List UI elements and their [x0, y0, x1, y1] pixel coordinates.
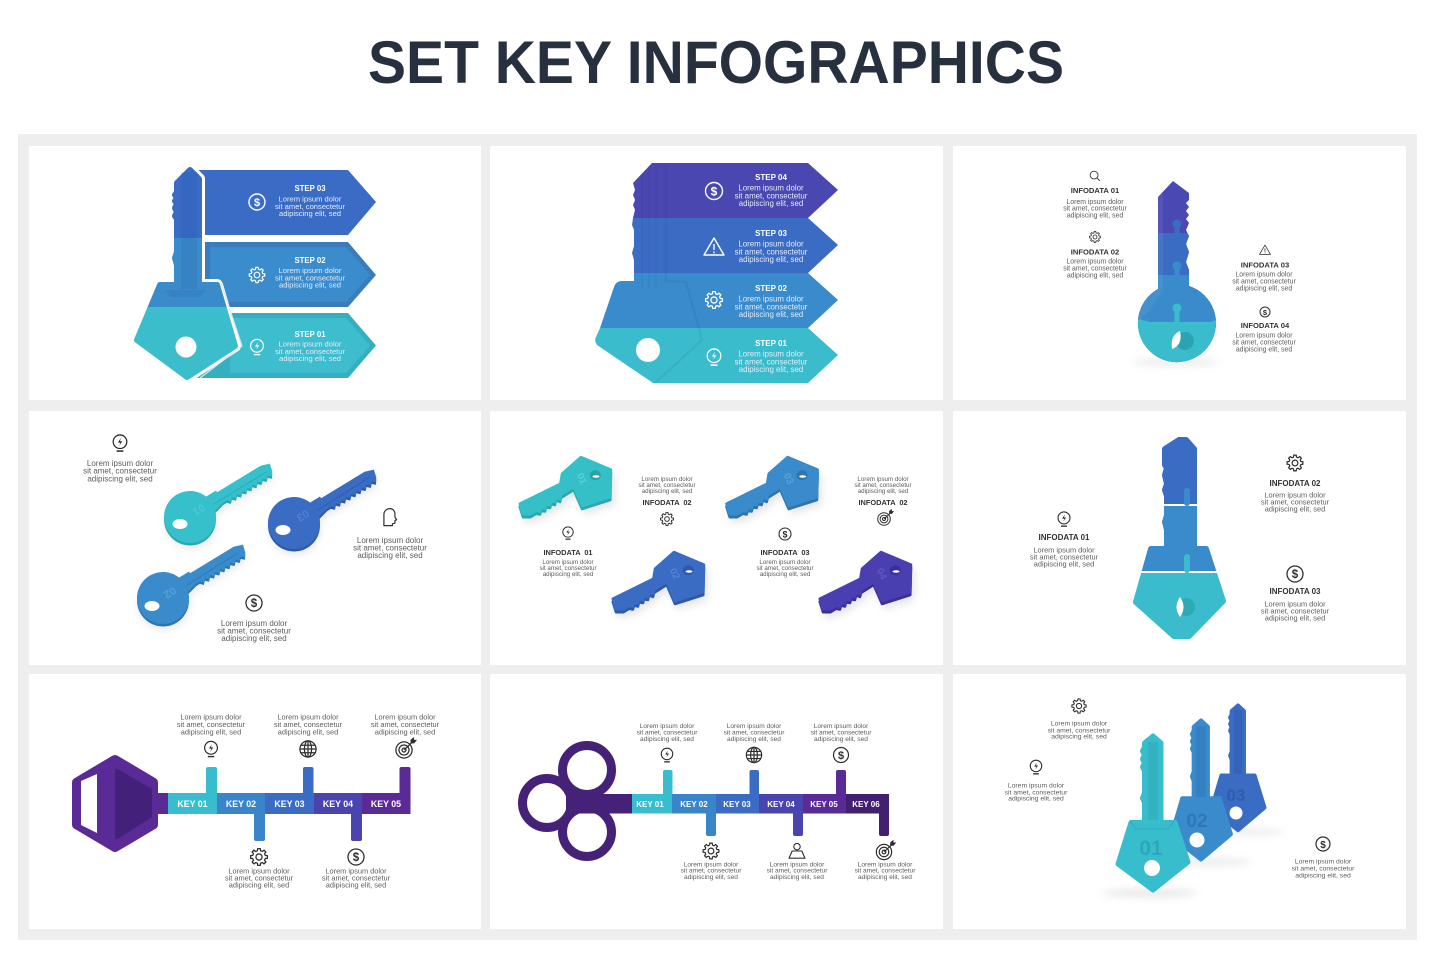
band: step 04 — [633, 163, 838, 218]
segmented key — [1136, 440, 1223, 636]
segment: key 05: KEY 05 — [810, 800, 838, 809]
icon: bulb — [251, 339, 263, 355]
key 02 — [613, 552, 707, 616]
arrow: step 02 — [200, 242, 376, 307]
text: infodata 02 right: Lorem ipsum dolor — [857, 476, 909, 483]
text block: adipiscing elit, sed — [770, 874, 824, 881]
text block: adipiscing elit, sed — [221, 634, 287, 643]
key 01: 01 — [574, 472, 589, 487]
band: step 01 — [595, 328, 838, 383]
text: step 02: adipiscing elit, sed — [279, 280, 341, 290]
icon: bulb — [661, 748, 673, 762]
text block: Lorem ipsum dolor — [858, 862, 913, 868]
text: step 03: Lorem ipsum dolor — [738, 240, 804, 248]
text block: adipiscing elit, sed — [858, 874, 912, 881]
text: infodata 02: sit amet, consectetur — [1063, 266, 1127, 272]
text: infodata 02 — [1063, 248, 1127, 280]
text block: sit amet, consectetur — [1048, 728, 1111, 734]
timeline stems — [206, 767, 410, 841]
icon: gear — [1072, 699, 1086, 713]
text block: Lorem ipsum dolor — [684, 862, 739, 868]
text block: adipiscing elit, sed — [684, 874, 738, 881]
key 01: 01 — [1139, 837, 1163, 860]
panel: three standing keys — [953, 674, 1406, 929]
text block: Lorem ipsum dolor — [325, 866, 387, 876]
text block: sit amet, consectetur — [637, 730, 698, 736]
icon: dollar — [834, 748, 848, 762]
icon: gear — [1090, 232, 1100, 242]
segment: key 06 — [846, 794, 889, 814]
text: step 03 — [735, 229, 808, 264]
text: infodata 03: adipiscing elit, sed — [1265, 614, 1325, 622]
text block: adipiscing elit, sed — [1051, 734, 1107, 740]
icon: dollar — [1260, 307, 1270, 317]
text block: sit amet, consectetur — [681, 868, 742, 874]
text block: sit amet, consectetur — [855, 868, 916, 874]
panel: three flat keys — [29, 411, 481, 665]
text: infodata 02 — [638, 476, 696, 507]
segment: key 01 — [168, 793, 217, 814]
text: step 02: Lorem ipsum dolor — [738, 294, 804, 304]
key 03: 03 — [1227, 786, 1245, 805]
text: step 01: sit amet, consectetur — [735, 357, 808, 366]
text: infodata 03: sit amet, consectetur — [756, 565, 814, 572]
panel: vertical key in three parts — [953, 411, 1406, 665]
key 03: 03 — [294, 507, 311, 523]
segment: key 06: KEY 06 — [852, 800, 880, 809]
text: infodata 02: sit amet, consectetur — [1261, 498, 1330, 506]
segment: key 03: KEY 03 — [274, 799, 305, 809]
text: infodata 03: Lorem ipsum dolor — [1264, 600, 1326, 608]
segment: key 03 — [716, 794, 759, 814]
text: step 03: STEP 03 — [755, 229, 787, 238]
text: step 01: adipiscing elit, sed — [279, 354, 341, 363]
icon: dollar: $ — [782, 529, 788, 539]
icon: dollar — [1287, 566, 1303, 582]
text: infodata 01: Lorem ipsum dolor — [542, 559, 594, 566]
icon: search — [1090, 171, 1100, 181]
text block: Lorem ipsum dolor — [770, 862, 825, 868]
text: infodata 01: adipiscing elit, sed — [1034, 560, 1094, 568]
text: step 03: adipiscing elit, sed — [279, 209, 341, 218]
icon: target — [876, 841, 895, 860]
text: infodata 01 — [1063, 186, 1127, 220]
icon: dollar: $ — [1320, 840, 1326, 851]
segment: key 05: KEY 05 — [371, 799, 401, 809]
text: step 02: sit amet, consectetur — [735, 302, 808, 311]
key 03 — [726, 457, 821, 521]
key 01 — [1102, 736, 1198, 897]
text: infodata 02: adipiscing elit, sed — [1067, 272, 1123, 280]
timeline stems — [663, 770, 889, 836]
text block: Lorem ipsum dolor — [228, 866, 290, 876]
text block: adipiscing elit, sed — [375, 728, 435, 736]
text: infodata 04: INFODATA 04 — [1241, 321, 1290, 330]
text block: adipiscing elit, sed — [326, 880, 386, 890]
text: step 04: sit amet, consectetur — [735, 191, 808, 200]
hexagon key head — [77, 760, 169, 847]
text: infodata 02: sit amet, consectetur — [638, 482, 696, 489]
text block: Lorem ipsum dolor — [640, 723, 695, 730]
icon: warning — [1260, 245, 1270, 254]
text block: sit amet, consectetur — [1292, 866, 1355, 872]
key 02: 02 — [667, 567, 682, 582]
text: infodata 03: sit amet, consectetur — [1261, 606, 1330, 616]
icon: dollar — [249, 194, 265, 210]
text block: adipiscing elit, sed — [229, 880, 289, 890]
text: infodata 01: sit amet, consectetur — [539, 565, 597, 572]
text block: Lorem ipsum dolor — [1051, 720, 1108, 728]
icon: bulb — [1058, 512, 1070, 526]
text block: sit amet, consectetur — [274, 720, 343, 729]
key shape — [137, 170, 242, 378]
text: infodata 02: adipiscing elit, sed — [642, 488, 693, 495]
text block: sit amet, consectetur — [767, 868, 828, 874]
title: SET KEY INFOGRAPHICS — [368, 29, 1064, 96]
text: infodata 02: INFODATA 02 — [1071, 248, 1119, 256]
segment: key 01 — [632, 794, 672, 814]
panel: clover key timeline — [490, 674, 943, 929]
text: step 01: Lorem ipsum dolor — [738, 350, 804, 358]
text: infodata 02: INFODATA 02 — [1270, 479, 1321, 488]
text block: Lorem ipsum dolor — [87, 459, 153, 468]
segment: key 03: KEY 03 — [723, 800, 751, 809]
text block: adipiscing elit, sed — [814, 736, 868, 743]
text block: adipiscing elit, sed — [87, 474, 153, 484]
text: step 01 — [735, 339, 808, 374]
text: step 02: sit amet, consectetur — [275, 273, 346, 282]
segment: key 01: KEY 01 — [636, 800, 664, 809]
band: step 02 — [600, 273, 838, 328]
key 02 — [1171, 721, 1252, 866]
text: infodata 01: INFODATA 01 — [543, 548, 593, 557]
text: step 04 — [735, 173, 808, 208]
text: step 03: STEP 03 — [294, 184, 326, 193]
icon: bulb — [563, 527, 573, 539]
text: step 02: adipiscing elit, sed — [739, 310, 803, 319]
key 03 — [1211, 705, 1284, 835]
key details — [642, 165, 702, 383]
icon: dollar: $ — [1263, 308, 1268, 317]
text: infodata 01: INFODATA 01 — [1071, 186, 1120, 195]
text: step 01: sit amet, consectetur — [275, 347, 346, 356]
segment: key 02 — [672, 794, 716, 814]
icon: dollar: $ — [251, 598, 258, 610]
text: step 04: STEP 04 — [755, 173, 787, 182]
text: infodata 01: adipiscing elit, sed — [1067, 212, 1123, 220]
text: step 04: adipiscing elit, sed — [739, 199, 803, 208]
text block: Lorem ipsum dolor — [277, 712, 339, 722]
text: infodata 02: adipiscing elit, sed — [1265, 504, 1325, 514]
text: infodata 04 — [1232, 321, 1296, 354]
text: infodata 03: adipiscing elit, sed — [760, 571, 811, 578]
text block: Lorem ipsum dolor — [727, 723, 782, 730]
text: infodata 03 — [756, 548, 814, 578]
text block: adipiscing elit, sed — [1295, 872, 1351, 880]
text: infodata 02: INFODATA 02 — [642, 498, 692, 507]
text block: Lorem ipsum dolor — [374, 712, 436, 722]
icon: globe — [746, 747, 762, 763]
icon: gear — [703, 843, 719, 859]
icon: dollar — [706, 182, 722, 200]
icon: dollar: $ — [838, 750, 844, 762]
text: infodata 02: Lorem ipsum dolor — [641, 476, 693, 483]
icon: warning — [704, 238, 724, 255]
panel: hexagon key timeline — [29, 674, 481, 929]
segment: key 04: KEY 04 — [323, 799, 353, 809]
text block: adipiscing elit, sed — [181, 728, 241, 736]
arrow: step 03 — [198, 170, 376, 235]
text: infodata 02: Lorem ipsum dolor — [1066, 258, 1124, 266]
text: infodata 02 right: INFODATA 02 — [858, 498, 908, 507]
text block: Lorem ipsum dolor — [180, 712, 242, 722]
text: step 01: adipiscing elit, sed — [739, 365, 803, 374]
text: step 03: sit amet, consectetur — [275, 202, 346, 211]
text: infodata 04: adipiscing elit, sed — [1236, 346, 1292, 354]
icon: gear — [1287, 455, 1303, 471]
segment: key 05 — [803, 794, 846, 814]
key 01 — [154, 445, 286, 559]
text block: adipiscing elit, sed — [278, 728, 338, 736]
text: step 01: Lorem ipsum dolor — [279, 340, 342, 348]
text: step 01: STEP 01 — [755, 339, 787, 348]
segment: key 02: KEY 02 — [680, 800, 708, 809]
text block: sit amet, consectetur — [217, 626, 291, 636]
text: step 03: sit amet, consectetur — [735, 247, 808, 256]
segment: key 02 — [217, 793, 265, 814]
panel: four pentagon keys — [490, 411, 943, 665]
segment: key 03 — [265, 793, 314, 814]
text block: sit amet, consectetur — [1005, 790, 1068, 796]
text: infodata 02 right: adipiscing elit, sed — [858, 488, 909, 495]
key 01: 01 — [190, 501, 207, 517]
icon: gear — [706, 292, 722, 308]
text: infodata 02 right: sit amet, consectetur — [854, 482, 912, 489]
text: step 02 — [735, 284, 808, 319]
text block: Lorem ipsum dolor — [221, 619, 287, 628]
segment: key 04 — [759, 794, 803, 814]
text: step 02: STEP 02 — [755, 284, 787, 293]
text block: Lorem ipsum dolor — [357, 536, 423, 545]
key hole — [636, 338, 660, 362]
text: infodata 03: INFODATA 03 — [1270, 587, 1321, 596]
icon: bulb — [205, 741, 217, 757]
puzzle key — [1138, 181, 1216, 362]
icon: user — [789, 843, 805, 858]
text block: Lorem ipsum dolor — [1008, 782, 1065, 790]
icon: gear — [249, 267, 265, 283]
icon: gear — [661, 513, 673, 525]
text: step 03 — [275, 184, 346, 218]
text block: sit amet, consectetur — [353, 544, 427, 552]
icon: dollar: $ — [353, 852, 360, 864]
text block: adipiscing elit, sed — [727, 736, 781, 743]
segment: key 02: KEY 02 — [226, 799, 256, 809]
icon: dollar: $ — [254, 197, 260, 209]
text: infodata 03: sit amet, consectetur — [1232, 278, 1296, 286]
key shadow — [1131, 358, 1219, 366]
text: step 01: STEP 01 — [294, 330, 326, 339]
text: infodata 01: sit amet, consectetur — [1030, 552, 1099, 562]
text: step 02: STEP 02 — [294, 256, 326, 265]
text: step 02: Lorem ipsum dolor — [279, 266, 342, 275]
text: infodata 03: Lorem ipsum dolor — [759, 559, 811, 566]
text: step 02 — [275, 256, 346, 290]
text: step 03: adipiscing elit, sed — [739, 255, 803, 264]
panel: key with four chevron steps — [490, 146, 943, 400]
text block: sit amet, consectetur — [177, 720, 246, 729]
icon: dollar — [246, 595, 262, 611]
text: infodata 02 — [1261, 479, 1330, 514]
icon: bulb — [113, 435, 127, 451]
text: infodata 01: Lorem ipsum dolor — [1033, 546, 1095, 554]
text block: sit amet, consectetur — [225, 874, 294, 882]
segment: key 01: KEY 01 — [177, 799, 208, 809]
text: infodata 01 — [1030, 533, 1099, 568]
text: infodata 01: sit amet, consectetur — [1063, 206, 1127, 212]
arrow: step 01 — [190, 313, 376, 378]
text: infodata 01: INFODATA 01 — [1039, 533, 1090, 542]
icon: dollar: $ — [1292, 569, 1299, 581]
text block: sit amet, consectetur — [811, 730, 872, 736]
text: infodata 04: Lorem ipsum dolor — [1235, 332, 1293, 340]
icon: target — [396, 738, 416, 758]
icon: globe — [300, 741, 316, 757]
text: infodata 02: Lorem ipsum dolor — [1264, 490, 1326, 500]
text: infodata 02 right — [854, 476, 912, 507]
icon: target — [878, 510, 893, 525]
key 02: 02 — [161, 584, 178, 600]
icon: bulb — [1030, 760, 1042, 774]
panel: key with three step arrows — [29, 146, 481, 400]
segment: key 04: KEY 04 — [767, 800, 795, 809]
text: infodata 04: sit amet, consectetur — [1232, 340, 1296, 346]
text: infodata 03 — [1232, 260, 1296, 292]
text block: adipiscing elit, sed — [640, 736, 694, 743]
text: infodata 01: adipiscing elit, sed — [543, 571, 594, 578]
text: infodata 03: Lorem ipsum dolor — [1235, 272, 1293, 278]
text: infodata 03 — [1261, 587, 1330, 622]
icon: dollar — [1316, 837, 1330, 851]
key 01 — [520, 457, 614, 521]
clover key head — [522, 746, 632, 856]
key 03 — [258, 451, 390, 565]
icon: bulb — [707, 349, 721, 365]
icon: dollar — [779, 528, 791, 540]
key 04 — [820, 552, 914, 616]
key 03: 03 — [781, 472, 795, 487]
text: step 04: Lorem ipsum dolor — [738, 184, 804, 192]
key 04: 04 — [874, 567, 889, 582]
text: step 03: Lorem ipsum dolor — [279, 194, 342, 204]
band: step 03 — [632, 218, 838, 273]
text block: Lorem ipsum dolor — [1295, 858, 1352, 866]
text block: sit amet, consectetur — [322, 874, 391, 882]
icon: head — [384, 509, 397, 526]
text block: sit amet, consectetur — [371, 720, 440, 729]
text: infodata 03: INFODATA 03 — [1241, 260, 1289, 270]
text: infodata 01 — [539, 548, 597, 578]
text block: Lorem ipsum dolor — [814, 723, 869, 730]
text block: sit amet, consectetur — [724, 730, 785, 736]
text: infodata 03: INFODATA 03 — [760, 548, 810, 557]
key 02 — [127, 526, 259, 640]
segment: key 04 — [314, 793, 362, 814]
text: step 01 — [275, 330, 346, 363]
text: infodata 03: adipiscing elit, sed — [1236, 286, 1292, 292]
text block: sit amet, consectetur — [83, 466, 157, 476]
text block: adipiscing elit, sed — [357, 551, 423, 560]
key 02: 02 — [1186, 811, 1208, 832]
text block: adipiscing elit, sed — [1008, 796, 1064, 802]
text: infodata 01: Lorem ipsum dolor — [1066, 199, 1124, 206]
icon: dollar: $ — [711, 184, 718, 198]
segment: key 05 — [362, 793, 410, 814]
icon: gear — [251, 849, 267, 865]
icon: dollar — [348, 849, 364, 865]
panel: round puzzle key — [953, 146, 1406, 400]
